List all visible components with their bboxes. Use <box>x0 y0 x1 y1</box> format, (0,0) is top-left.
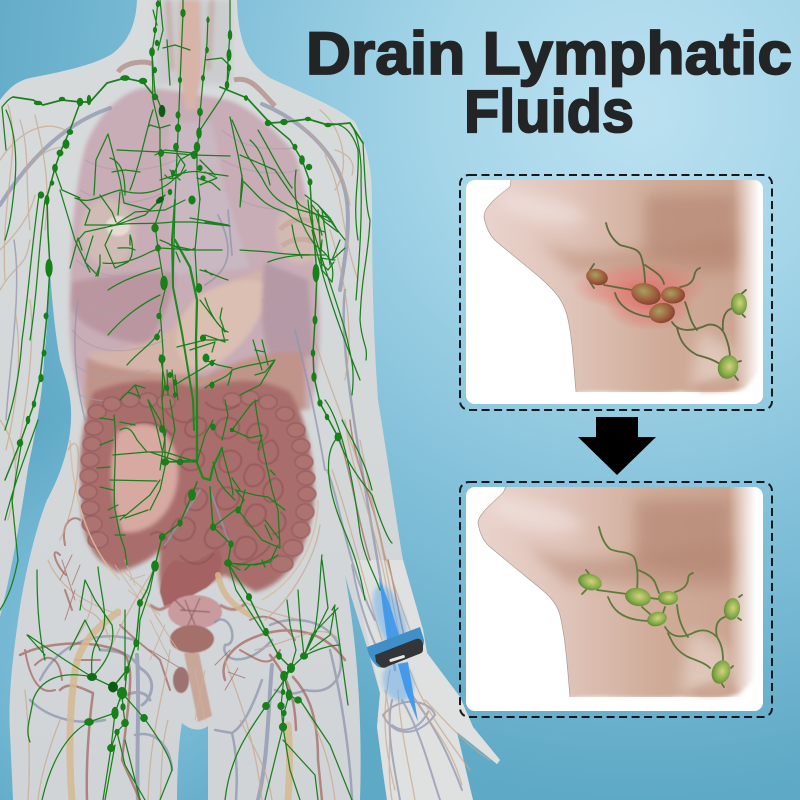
pelvic organs <box>150 548 245 722</box>
groin nodes <box>87 673 97 681</box>
diaphragm band <box>70 272 175 345</box>
left axillary chain <box>5 103 80 480</box>
abdomen right <box>228 400 285 570</box>
blue-grey veins <box>0 104 462 800</box>
iliac chains <box>113 482 197 687</box>
inflammation glow <box>578 266 700 306</box>
subclavian right <box>220 87 363 143</box>
lymph nodes <box>17 1 341 752</box>
liver <box>86 270 262 381</box>
hand and forearm highlight <box>350 560 500 800</box>
pelvic red-brown network <box>60 555 245 690</box>
heart area <box>168 122 250 275</box>
abdomen <box>97 400 197 565</box>
bones <box>70 575 290 800</box>
breast tissue <box>80 198 324 266</box>
intestine mass <box>80 381 314 600</box>
upper arm nodes <box>34 101 42 105</box>
neck illustration <box>478 483 768 718</box>
veins, arteries and nerves <box>0 104 490 800</box>
groin left <box>27 567 122 800</box>
abdominal nodes <box>159 425 165 433</box>
panel: after, drained lymph nodes <box>460 482 772 718</box>
trachea <box>168 0 212 110</box>
human body figure with lymphatic system <box>0 0 500 800</box>
stomach region <box>176 280 265 369</box>
skin shading <box>546 242 738 278</box>
chest branches left <box>94 110 193 210</box>
shoulder muscles <box>118 62 275 106</box>
translucent body silhouette <box>0 0 500 800</box>
skin <box>484 176 760 392</box>
neck shading <box>155 0 232 85</box>
lymphatic vessels <box>0 0 392 800</box>
chest and abdomen base <box>70 88 320 410</box>
transverse colon region <box>85 352 305 410</box>
right axillary chain <box>270 123 338 437</box>
skin shading <box>533 546 732 588</box>
neck and central chains <box>173 0 193 400</box>
healthy nodes <box>576 571 742 686</box>
thoracic duct <box>175 240 222 480</box>
arrow: before to after <box>578 417 656 475</box>
panel: before, swollen lymph nodes <box>460 175 772 412</box>
mesenteric right branches <box>175 340 275 395</box>
skin <box>478 483 756 697</box>
spleen <box>262 262 314 356</box>
indicator <box>389 655 405 662</box>
lymph vessels <box>582 527 742 687</box>
subclavian left <box>13 78 155 105</box>
wristband <box>367 627 424 668</box>
swollen nodes <box>584 266 747 382</box>
white fade bottom <box>570 682 763 711</box>
neck illustration <box>484 176 770 412</box>
organs <box>70 0 320 600</box>
groin right <box>225 555 352 800</box>
uterus vessels <box>175 598 210 625</box>
rectum <box>160 548 222 606</box>
rib lines <box>72 130 310 401</box>
dashed border <box>460 482 772 717</box>
title line 1: Drain Lymphatic <box>306 20 792 87</box>
blue nerve stimulation glow <box>366 578 418 722</box>
white fade bottom <box>576 376 763 404</box>
colon branch lines <box>213 478 278 565</box>
skin outline <box>484 180 576 392</box>
red arteries <box>20 420 405 800</box>
title <box>306 20 792 145</box>
chest branches right <box>230 117 330 232</box>
lymph vessels <box>590 223 746 380</box>
bladder <box>170 625 214 653</box>
small intestine light centre <box>111 424 178 532</box>
dashed border <box>460 175 772 410</box>
pelvic dense lines <box>115 560 205 720</box>
white card <box>466 180 763 404</box>
white card <box>466 487 763 711</box>
intestine coils <box>79 391 316 572</box>
tan nerves <box>0 105 490 800</box>
uterus <box>168 595 222 629</box>
canal <box>184 653 212 722</box>
capsule <box>375 639 423 668</box>
strap <box>367 627 424 668</box>
side peritoneum lines <box>70 440 318 600</box>
skin outline <box>478 487 570 697</box>
title line 2: Fluids <box>464 78 634 145</box>
ovary <box>173 667 189 693</box>
